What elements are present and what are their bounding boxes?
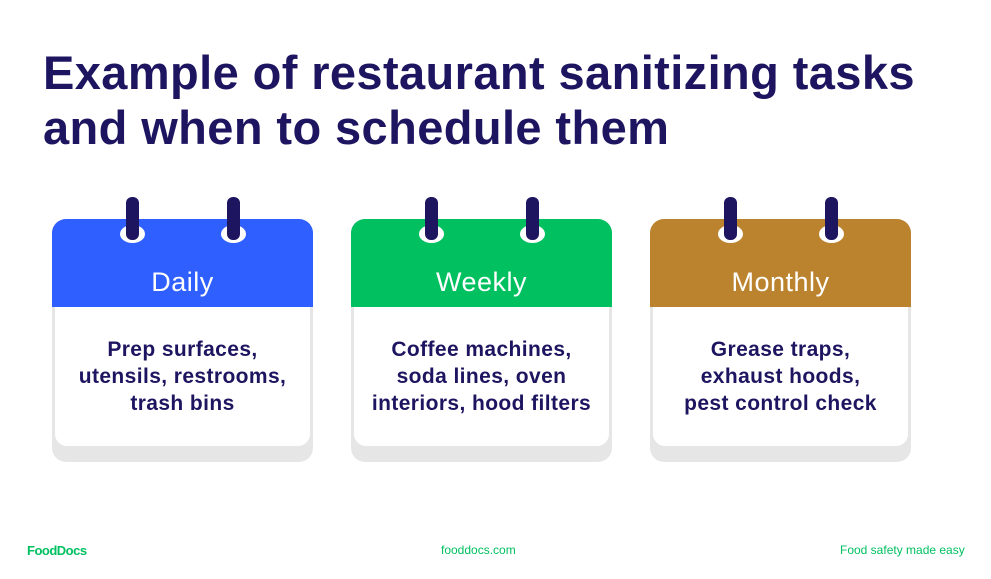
text: daily tasks — [55, 307, 310, 446]
footer url: fooddocs.com — [441, 543, 516, 557]
header: monthly: Monthly — [731, 267, 830, 297]
text: monthly tasks: Grease traps, — [711, 338, 850, 361]
text: daily tasks: trash bins — [130, 392, 235, 415]
text: monthly tasks — [653, 307, 908, 446]
title — [43, 46, 915, 154]
header: daily: Daily — [151, 267, 214, 297]
panel: weekly — [351, 197, 612, 462]
text: weekly tasks — [354, 307, 609, 446]
text: weekly tasks: Coffee machines, — [391, 338, 572, 361]
panel: daily — [52, 197, 313, 462]
text: weekly tasks: interiors, hood filters — [372, 392, 591, 415]
title: Example of restaurant sanitizing tasks — [43, 46, 915, 99]
text: weekly tasks: soda lines, oven — [397, 365, 566, 388]
text: monthly tasks: pest control check — [684, 392, 877, 415]
text: daily tasks: utensils, restrooms, — [79, 365, 286, 388]
panel: monthly — [650, 197, 911, 462]
footer tagline: Food safety made easy — [840, 543, 965, 557]
header: daily — [52, 219, 313, 307]
header: weekly: Weekly — [436, 267, 527, 297]
footer logo: FoodDocs — [27, 543, 87, 558]
title: and when to schedule them — [43, 101, 669, 154]
header: monthly — [650, 219, 911, 307]
header: weekly — [351, 219, 612, 307]
text: daily tasks: Prep surfaces, — [107, 338, 258, 361]
text: monthly tasks: exhaust hoods, — [701, 365, 860, 388]
